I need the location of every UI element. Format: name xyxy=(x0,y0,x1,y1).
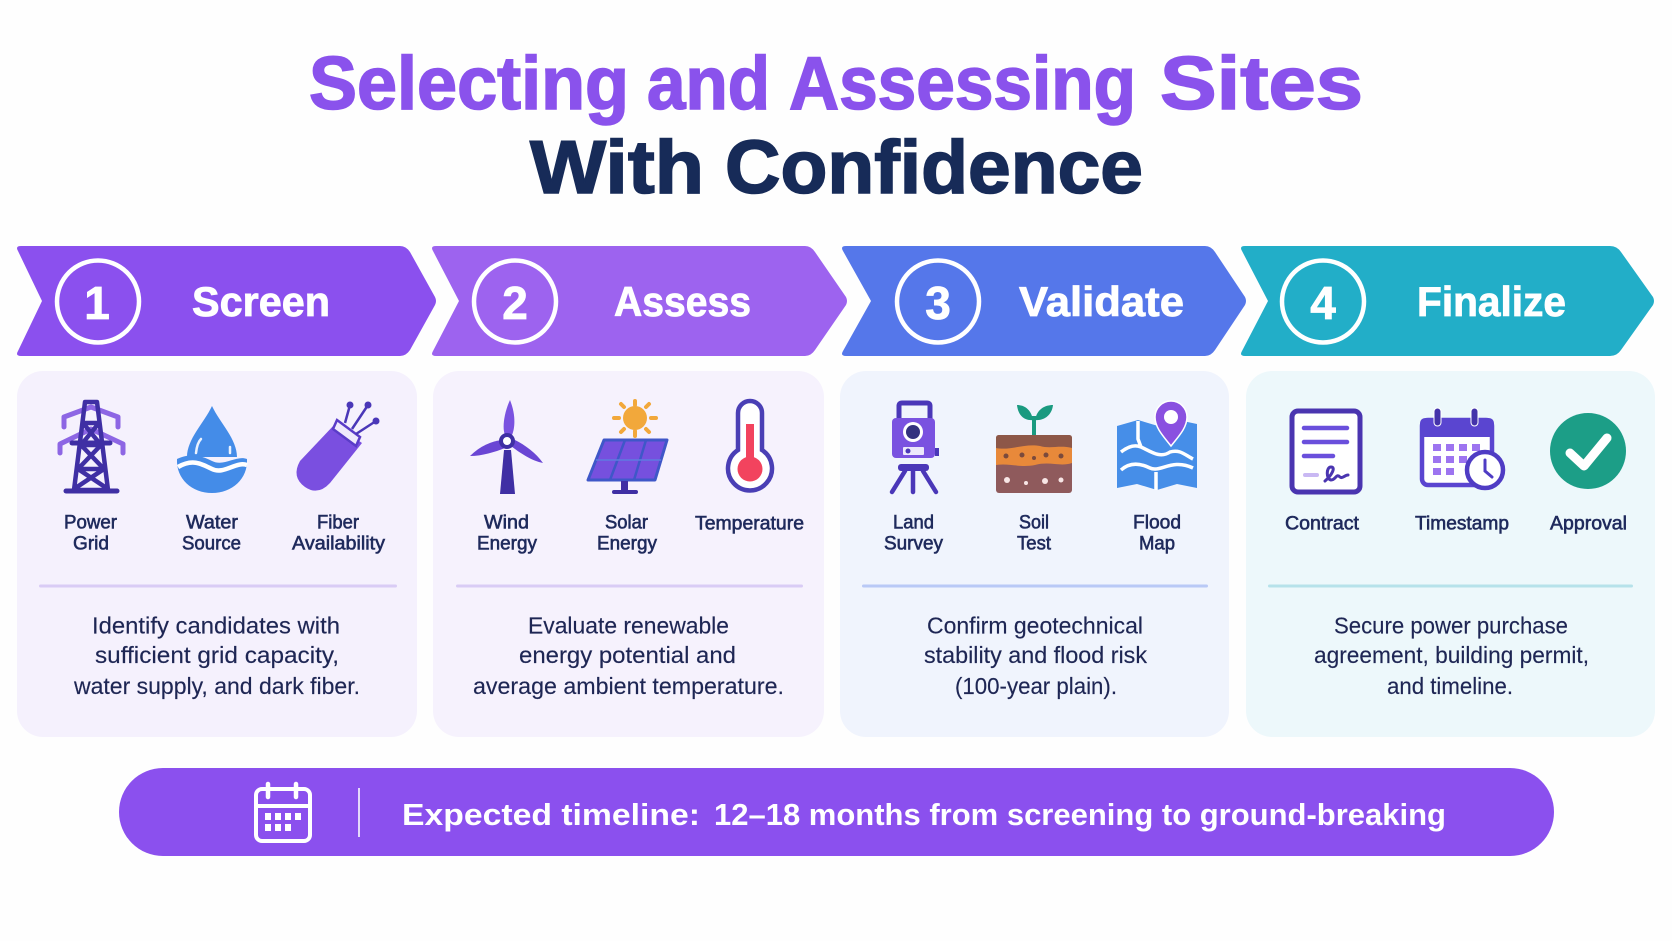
title: and xyxy=(647,41,770,125)
label: soil test: Test xyxy=(1017,532,1052,554)
icon: approval check xyxy=(1550,413,1626,489)
label: temperature: Temperature xyxy=(695,512,804,534)
icon: power grid tower xyxy=(60,402,123,491)
panel: screen xyxy=(17,371,417,737)
title xyxy=(309,41,1363,209)
description: validate: (100-year plain). xyxy=(955,673,1117,699)
step 2 chevron: Assess: 2 xyxy=(502,277,528,329)
title: Confidence xyxy=(725,125,1143,209)
description: validate: stability and flood risk xyxy=(924,642,1147,668)
label: approval: Approval xyxy=(1550,512,1627,534)
label: contract: Contract xyxy=(1285,512,1360,534)
description: screen: water supply, and dark fiber. xyxy=(73,673,360,699)
step 4 chevron: Finalize: Finalize xyxy=(1417,278,1566,325)
label: land survey: Land xyxy=(893,512,934,534)
label: fiber availability: Fiber xyxy=(317,512,359,534)
icon: water drop xyxy=(177,406,247,493)
label: soil test xyxy=(1017,512,1052,554)
icon: contract xyxy=(1292,411,1360,492)
label: water source: Source xyxy=(182,532,241,554)
description: finalize: and timeline. xyxy=(1387,673,1513,699)
description: validate xyxy=(924,612,1147,699)
label: solar energy xyxy=(597,512,657,554)
label: land survey xyxy=(884,512,943,554)
step 3 chevron: Validate: 3 xyxy=(925,277,951,329)
title: Selecting xyxy=(309,41,629,125)
banner text: 12–18 months from screening to ground-breaking xyxy=(714,797,1446,832)
icon: soil test with sprout xyxy=(996,405,1072,493)
step 4 chevron: Finalize: 4 xyxy=(1310,277,1336,329)
label: flood map: Flood xyxy=(1133,512,1181,534)
step 4 chevron: Finalize xyxy=(1241,246,1654,356)
icon: timestamp calendar with clock xyxy=(1420,408,1503,488)
step 1 chevron: Screen xyxy=(17,246,436,356)
label: solar energy: Solar xyxy=(605,512,648,534)
step 2 chevron: Assess xyxy=(432,246,847,356)
label: timestamp: Timestamp xyxy=(1415,512,1509,534)
banner text: Expected timeline: xyxy=(402,797,700,832)
title: With xyxy=(530,125,704,209)
description: finalize: Secure power purchase xyxy=(1334,612,1568,638)
description: assess: Evaluate renewable xyxy=(528,612,729,638)
panel: finalize xyxy=(1246,371,1655,737)
description: assess xyxy=(473,612,784,699)
label: land survey: Survey xyxy=(884,532,943,554)
timeline banner xyxy=(119,768,1554,856)
description: assess: energy potential and xyxy=(519,642,736,668)
panel: validate xyxy=(840,371,1229,737)
description: screen xyxy=(73,612,360,699)
step 2 chevron: Assess: Assess xyxy=(614,278,751,325)
label: power grid xyxy=(64,512,117,554)
icon: land survey instrument xyxy=(892,403,939,492)
label: flood map xyxy=(1133,512,1181,554)
step 3 chevron: Validate: Validate xyxy=(1019,278,1184,325)
icon: fiber cable xyxy=(296,402,380,491)
description: finalize xyxy=(1314,612,1589,699)
label: soil test: Soil xyxy=(1019,512,1049,534)
label: wind energy: Energy xyxy=(477,532,537,554)
label: fiber availability xyxy=(292,512,385,554)
icon: thermometer xyxy=(728,401,772,490)
label: power grid: Power xyxy=(64,512,117,534)
title: Sites xyxy=(1160,41,1363,125)
label: wind energy: Wind xyxy=(484,512,529,534)
step 1 chevron: Screen: Screen xyxy=(192,278,330,325)
label: flood map: Map xyxy=(1139,532,1175,554)
label: water source xyxy=(182,512,241,554)
label: power grid: Grid xyxy=(73,532,109,554)
step 3 chevron: Validate xyxy=(842,246,1246,356)
description: screen: sufficient grid capacity, xyxy=(95,642,339,668)
icon: solar panel with sun xyxy=(588,401,667,494)
step 1 chevron: Screen: 1 xyxy=(84,277,110,329)
label: water source: Water xyxy=(186,512,238,534)
label: wind energy xyxy=(477,512,537,554)
label: fiber availability: Availability xyxy=(292,532,385,554)
description: assess: average ambient temperature. xyxy=(473,673,784,699)
title: Assessing xyxy=(789,41,1136,125)
icon: wind turbine xyxy=(470,400,543,494)
icon: calendar xyxy=(256,784,310,841)
panel: assess xyxy=(433,371,824,737)
label: solar energy: Energy xyxy=(597,532,657,554)
description: finalize: agreement, building permit, xyxy=(1314,642,1589,668)
description: screen: Identify candidates with xyxy=(92,612,340,638)
description: validate: Confirm geotechnical xyxy=(927,612,1143,638)
icon: flood map with pin xyxy=(1117,401,1197,490)
